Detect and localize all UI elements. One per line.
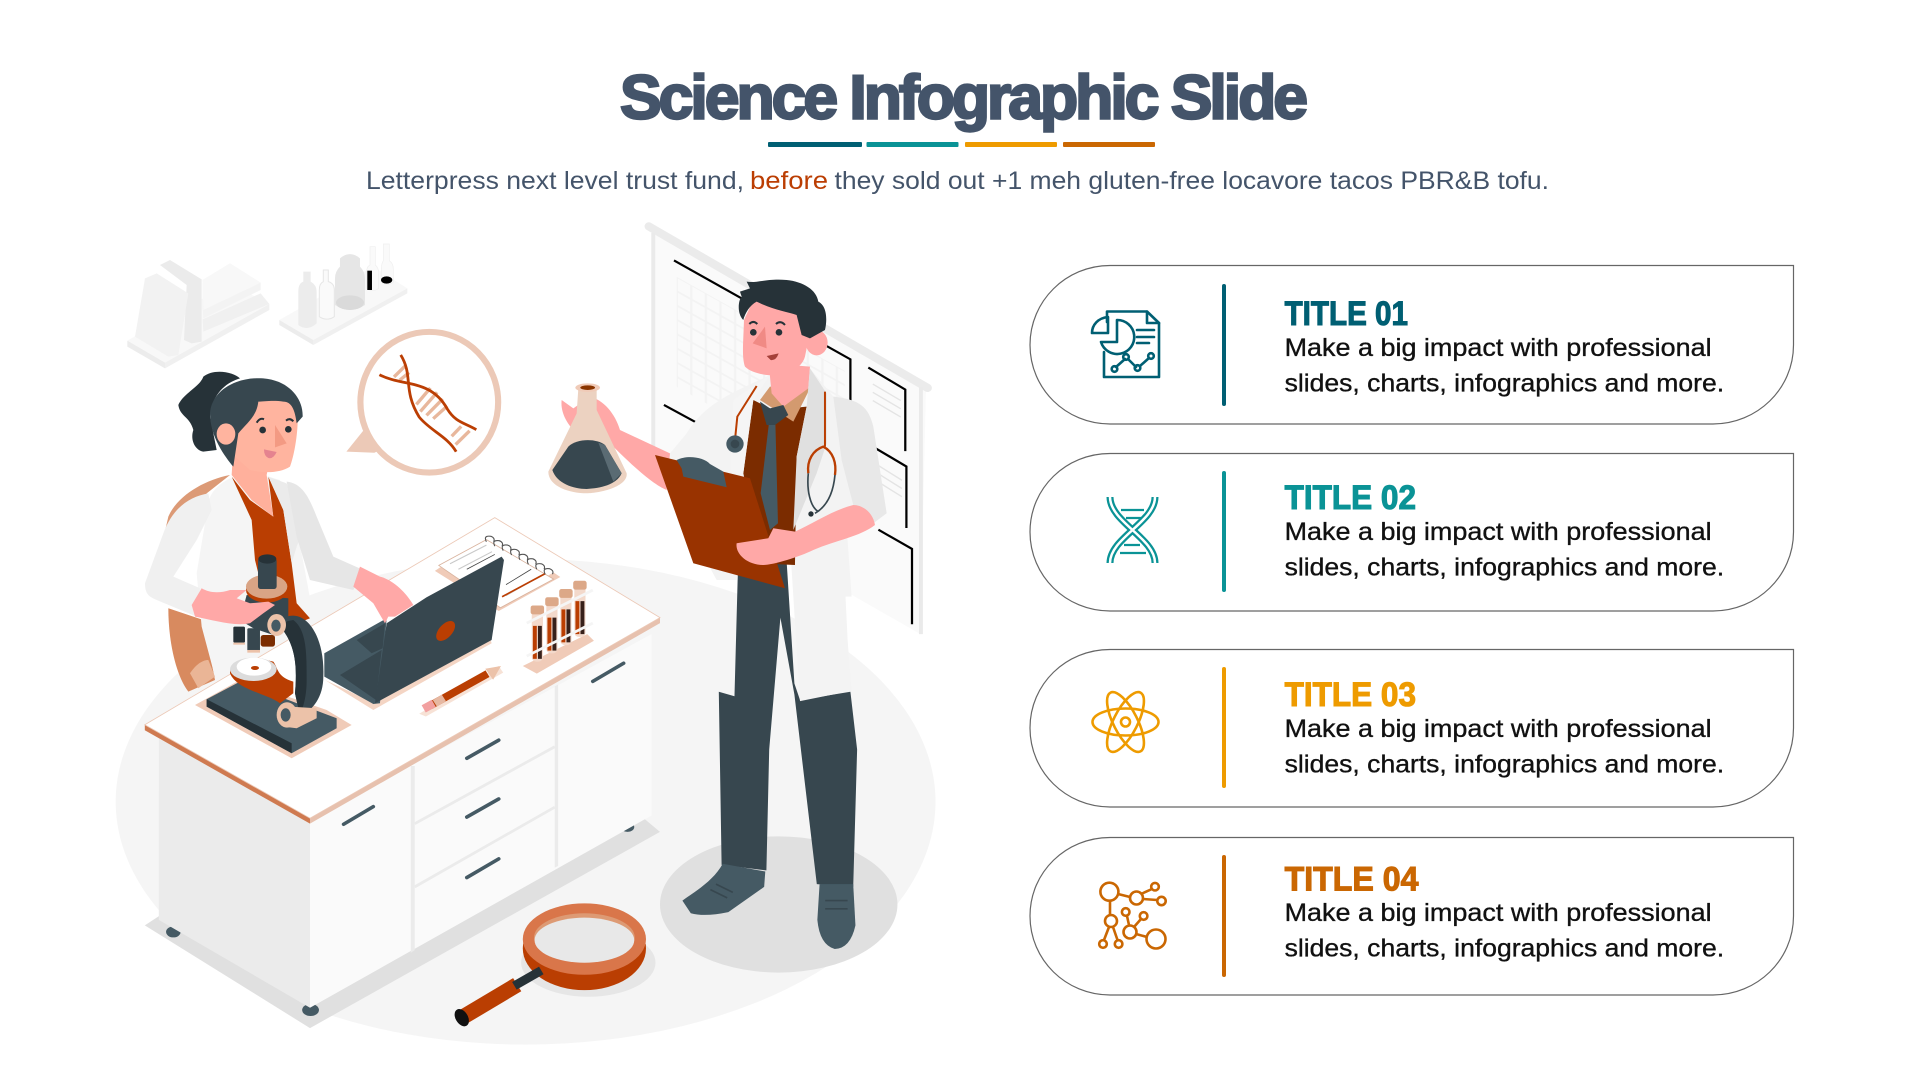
heading 2: TITLE 02 <box>1285 479 1416 517</box>
body text 4: Make a big impact with professional <box>1285 899 1712 927</box>
panel 2 <box>1030 454 1794 611</box>
subtitle: Letterpress next level trust fund, <box>366 167 744 195</box>
facial features <box>217 419 293 458</box>
microscope <box>195 554 352 758</box>
body text 3: Make a big impact with professional <box>1285 715 1712 743</box>
lapels <box>730 368 827 530</box>
body text 4: slides, charts, infographics and more. <box>1285 935 1724 963</box>
panel 4 <box>1030 838 1794 995</box>
flask <box>548 383 627 493</box>
woman right hand <box>353 567 413 623</box>
title: Science Infographic Slide <box>620 62 1308 132</box>
shirt <box>743 400 807 565</box>
ear <box>806 330 828 355</box>
illustration: science lab scene <box>116 226 936 1045</box>
body text 1 <box>1285 334 1724 398</box>
body text 3 <box>1285 715 1724 779</box>
panel 1 <box>1030 266 1794 424</box>
body text 2 <box>1285 518 1724 582</box>
woman scientist <box>145 372 363 692</box>
body text 2: Make a big impact with professional <box>1285 518 1712 546</box>
divider 4 <box>1222 855 1226 977</box>
panel 4 outline <box>1030 838 1794 995</box>
panel 1 outline <box>1030 266 1794 424</box>
panel 2 outline <box>1030 454 1794 611</box>
holding arm <box>736 505 875 565</box>
icon: DNA helix <box>1110 497 1155 563</box>
chair <box>163 475 230 692</box>
face <box>233 400 298 472</box>
notepad <box>435 536 560 611</box>
divider 3 <box>1222 667 1226 788</box>
clipboard <box>655 455 785 588</box>
facial features <box>749 322 785 360</box>
body text 2: slides, charts, infographics and more. <box>1285 554 1724 582</box>
orange shirt <box>232 477 310 633</box>
heading 4: TITLE 04 <box>1285 861 1419 899</box>
coat sleeve left <box>145 493 212 617</box>
subtitle: before <box>750 167 828 195</box>
doctor legs and shoes <box>682 524 857 949</box>
panel 3 outline <box>1030 650 1794 807</box>
collar <box>760 387 810 422</box>
hair <box>210 378 303 467</box>
hair <box>739 280 826 338</box>
title underline bars <box>768 142 1155 147</box>
subtitle: they sold out +1 meh gluten-free locavore tacos PBR&B tofu. <box>834 167 1549 195</box>
neck <box>770 363 810 407</box>
coat sleeve right <box>287 482 363 590</box>
coat body <box>197 477 313 677</box>
icon: report document <box>1092 312 1159 377</box>
desk <box>145 518 660 1016</box>
wall chart board <box>649 226 928 634</box>
divider 1 <box>1222 284 1226 406</box>
hair bun <box>178 372 240 452</box>
tie <box>760 402 788 530</box>
shelf: books and bottles <box>127 244 407 368</box>
panel 3 <box>1030 650 1794 807</box>
divider 2 <box>1222 471 1226 592</box>
test tubes <box>523 581 594 674</box>
icon: molecule network <box>1099 883 1166 948</box>
body text 1: Make a big impact with professional <box>1285 334 1712 362</box>
stethoscope <box>726 386 835 517</box>
body text 1: slides, charts, infographics and more. <box>1285 370 1724 398</box>
speech bubble with DNA <box>346 332 498 473</box>
heading 3: TITLE 03 <box>1285 676 1416 714</box>
left hand over microscope <box>192 588 275 624</box>
neck <box>232 447 273 517</box>
subtitle <box>366 167 1549 195</box>
face <box>743 300 810 376</box>
heading 1: TITLE 01 <box>1285 295 1408 333</box>
magnifying glass <box>452 903 656 1029</box>
background blob <box>116 559 936 1045</box>
body text 3: slides, charts, infographics and more. <box>1285 751 1724 779</box>
raised arm <box>561 397 670 490</box>
doctor torso and head <box>548 280 887 597</box>
laptop <box>324 557 504 710</box>
body text 4 <box>1285 899 1724 963</box>
coat lapel <box>268 477 303 563</box>
pencil <box>419 666 503 717</box>
lab coat <box>670 368 887 597</box>
icon: atom <box>1092 687 1158 757</box>
